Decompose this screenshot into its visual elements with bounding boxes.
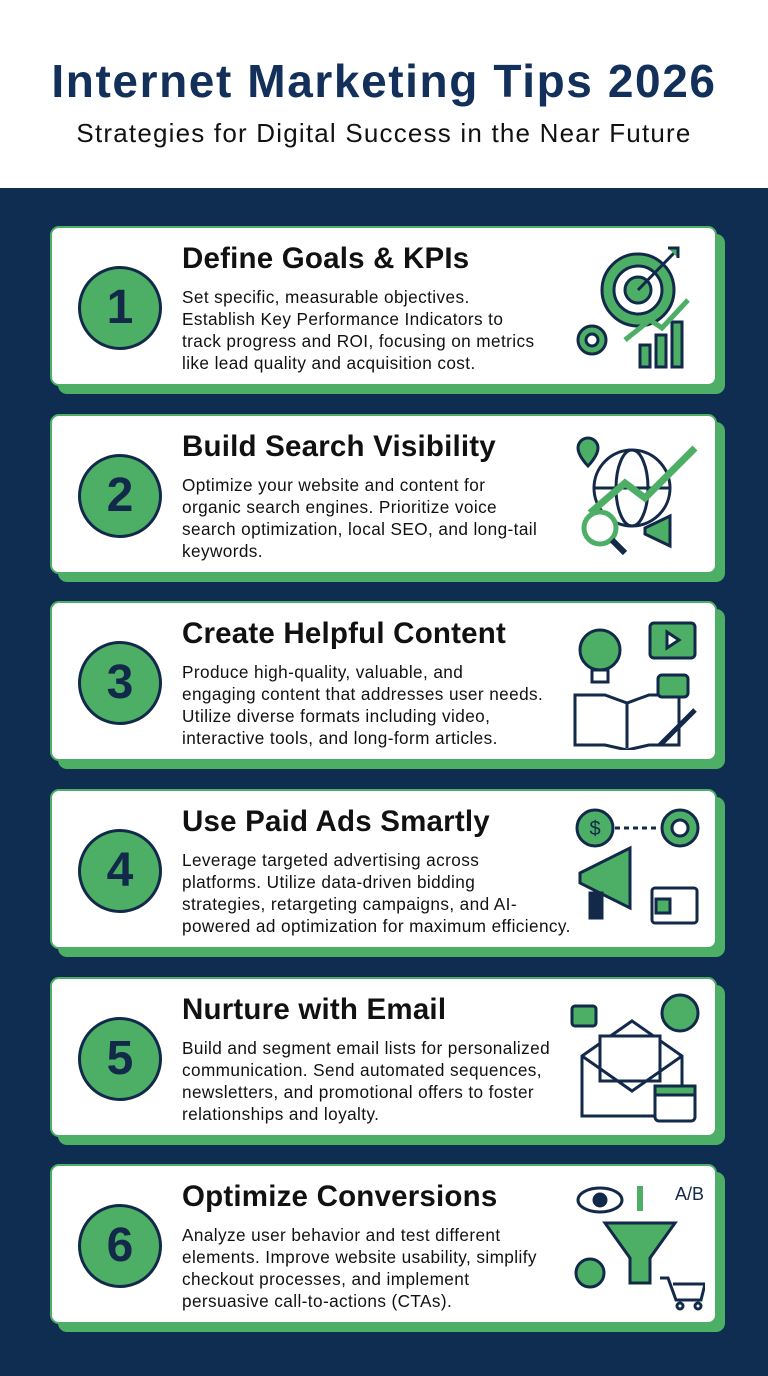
text 4: platforms. Utilize data-driven bidding	[182, 872, 475, 892]
text 4: strategies, retargeting campaigns, and AI-	[182, 894, 517, 914]
panel: step 1	[50, 226, 717, 386]
header	[0, 0, 768, 188]
text 5: relationships and loyalty.	[182, 1104, 379, 1124]
text 1: Set specific, measurable objectives.	[182, 287, 470, 307]
text 2	[182, 475, 537, 561]
number 1: 1	[107, 281, 133, 334]
icon: funnel: A/B	[675, 1184, 704, 1204]
heading 2: Build Search Visibility	[182, 430, 496, 463]
number 6: 6	[107, 1219, 133, 1272]
icon: content	[574, 622, 697, 750]
number 5: 5	[107, 1032, 133, 1085]
number 4	[78, 829, 162, 913]
text 1: like lead quality and acquisition cost.	[182, 353, 476, 373]
text 6: checkout processes, and implement	[182, 1269, 469, 1289]
icon: megaphone	[576, 808, 700, 924]
text 3: engaging content that addresses user needs.	[182, 684, 543, 704]
text 3: interactive tools, and long-form articles.	[182, 728, 498, 748]
title: Internet Marketing Tips 2026	[51, 55, 717, 107]
text 1: Establish Key Performance Indicators to	[182, 309, 503, 329]
number 3: 3	[107, 656, 133, 709]
heading 3: Create Helpful Content	[182, 617, 506, 650]
text 1	[182, 287, 534, 373]
text 5: newsletters, and promotional offers to foster	[182, 1082, 534, 1102]
text 3	[182, 662, 543, 748]
number 5	[78, 1017, 162, 1101]
number 4: 4	[107, 844, 133, 897]
number 3	[78, 641, 162, 725]
text 2: keywords.	[182, 541, 263, 561]
text 4	[182, 850, 571, 936]
panel: step 6	[50, 1164, 717, 1324]
text 3: Produce high-quality, valuable, and	[182, 662, 463, 682]
text 5: Build and segment email lists for personalized	[182, 1038, 550, 1058]
text 6: persuasive call-to-actions (CTAs).	[182, 1291, 452, 1311]
panel: step 5	[50, 977, 717, 1137]
text 2: organic search engines. Prioritize voice	[182, 497, 497, 517]
text 4: powered ad optimization for maximum efficiency.	[182, 916, 571, 936]
number 2: 2	[107, 469, 133, 522]
icon: target and chart	[576, 246, 690, 368]
text 6: elements. Improve website usability, simplify	[182, 1247, 537, 1267]
heading 5: Nurture with Email	[182, 993, 446, 1026]
icon: globe and search	[576, 436, 698, 556]
heading 4: Use Paid Ads Smartly	[182, 805, 490, 838]
panel: step 3	[50, 601, 717, 761]
text 4: Leverage targeted advertising across	[182, 850, 479, 870]
icon: megaphone: $	[589, 818, 601, 840]
text 2: Optimize your website and content for	[182, 475, 485, 495]
number 2	[78, 454, 162, 538]
text 1: track progress and ROI, focusing on metrics	[182, 331, 534, 351]
icon: email	[570, 994, 700, 1122]
text 5	[182, 1038, 550, 1124]
subtitle: Strategies for Digital Success in the Near Future	[76, 118, 692, 148]
text 5: communication. Send automated sequences,	[182, 1060, 542, 1080]
text 6	[182, 1225, 537, 1311]
heading 1: Define Goals & KPIs	[182, 242, 469, 275]
text 3: Utilize diverse formats including video,	[182, 706, 490, 726]
text 2: search optimization, local SEO, and long-tail	[182, 519, 537, 539]
panel: step 4	[50, 789, 717, 949]
number 6	[78, 1204, 162, 1288]
icon: funnel	[574, 1184, 705, 1310]
panel: step 2	[50, 414, 717, 574]
heading 6: Optimize Conversions	[182, 1180, 497, 1213]
number 1	[78, 266, 162, 350]
text 6: Analyze user behavior and test different	[182, 1225, 501, 1245]
